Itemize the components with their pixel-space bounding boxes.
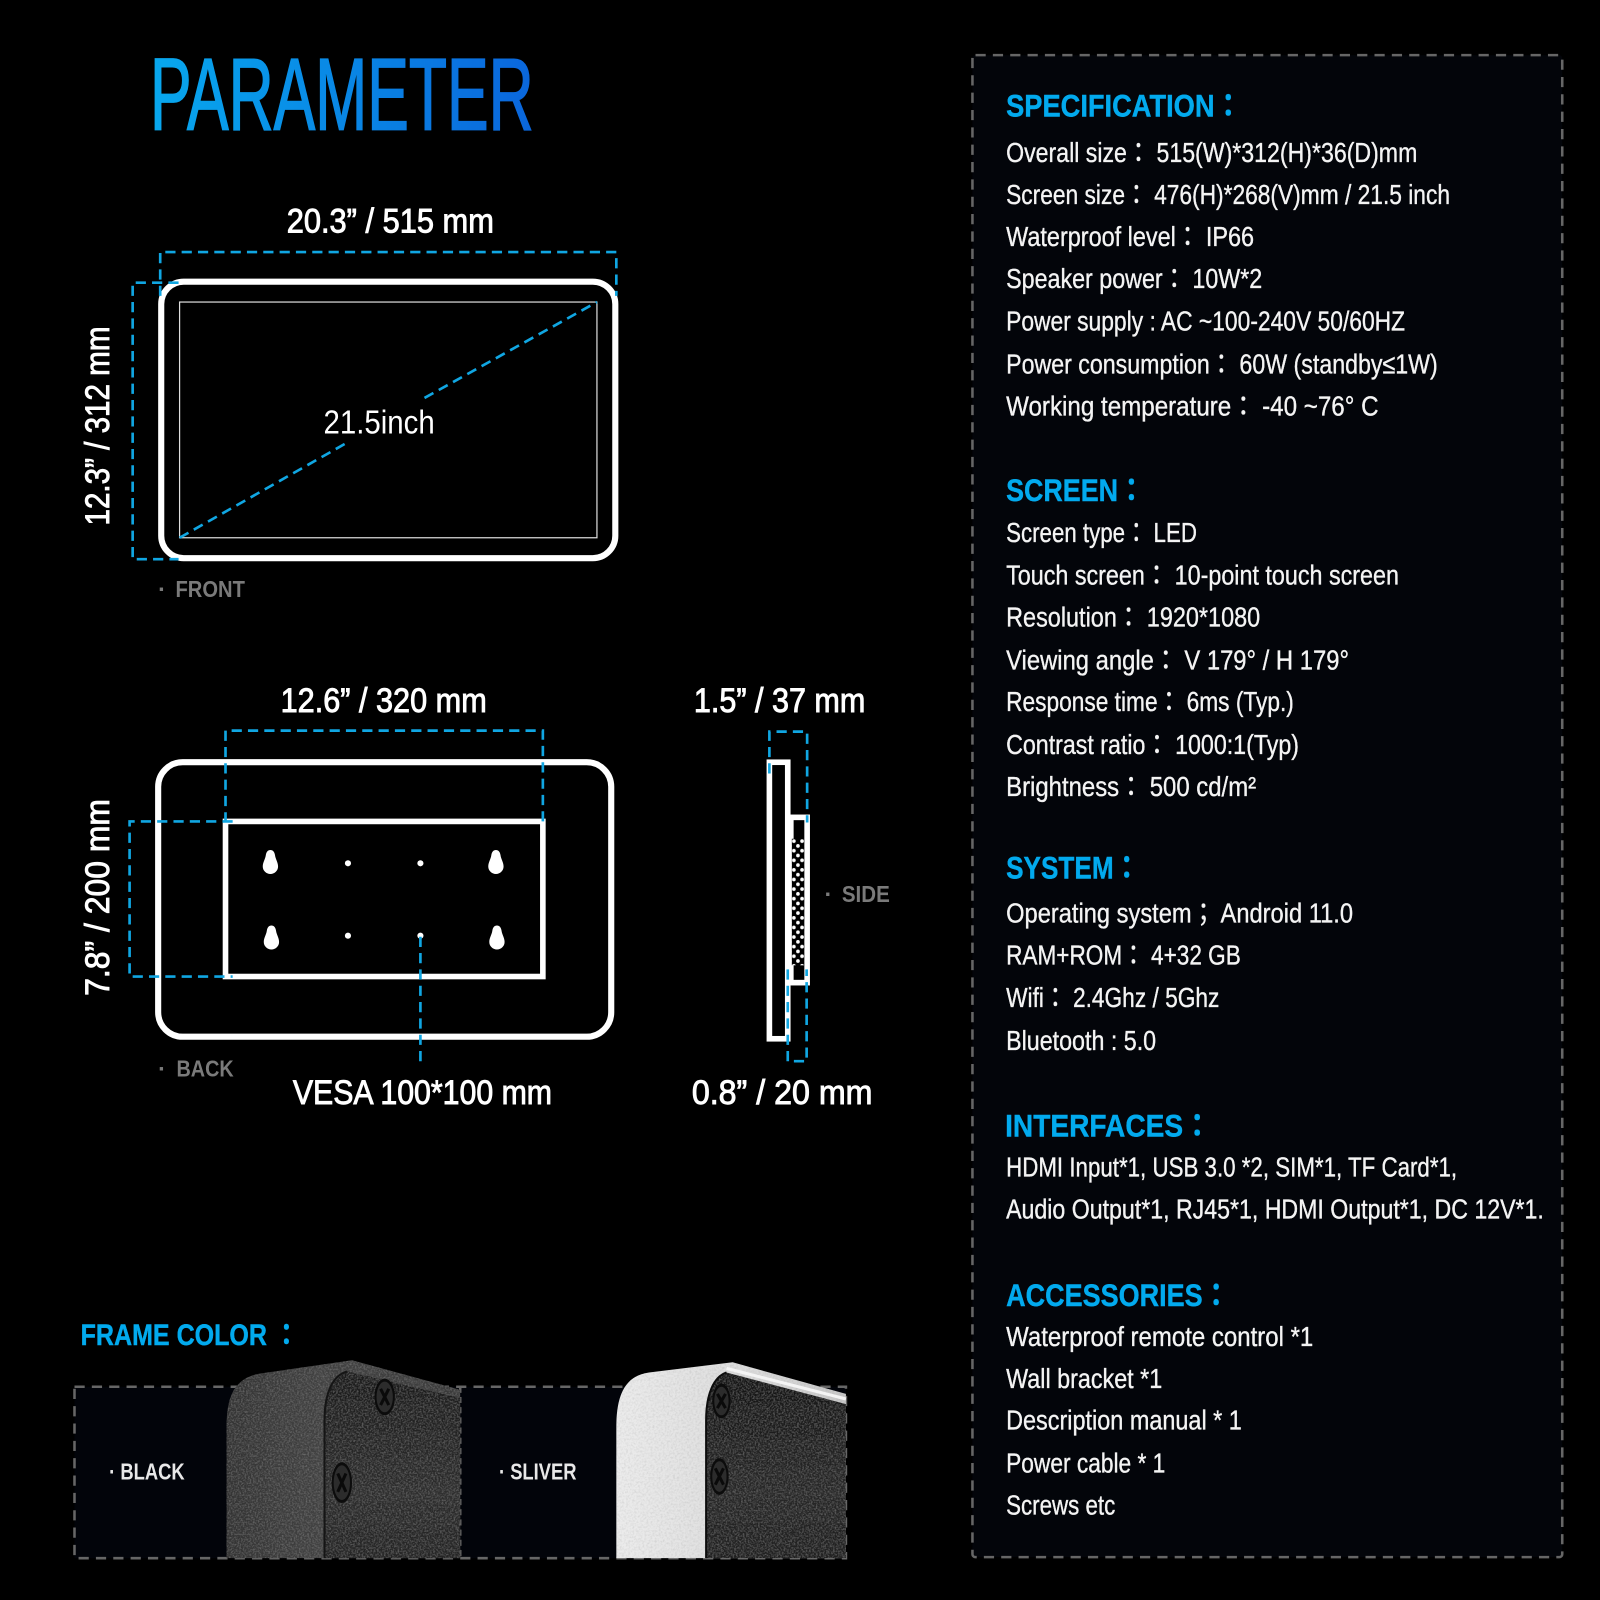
frame color dashed box xyxy=(74,1387,846,1558)
panel: specifications xyxy=(972,55,1562,1557)
title: PARAMETER xyxy=(150,38,534,152)
screen list: Viewing angle： V 179° / H 179° xyxy=(1006,644,1349,675)
panel: frame color xyxy=(74,1319,846,1558)
speaker perforation xyxy=(792,839,804,965)
side profile rear section xyxy=(791,817,807,983)
system list: Wifi： 2.4Ghz / 5Ghz xyxy=(1006,982,1219,1013)
screen size label: 21.5inch xyxy=(323,405,435,442)
back tag xyxy=(158,1056,234,1082)
screen list: Touch screen： 10-point touch screen xyxy=(1006,560,1399,591)
system list: RAM+ROM： 4+32 GB xyxy=(1006,939,1241,970)
front height label: 12.3” / 312 mm xyxy=(79,327,117,526)
panel: front view xyxy=(79,203,616,602)
accessories list: Wall bracket *1 xyxy=(1006,1363,1162,1394)
system heading: SYSTEM： xyxy=(1006,850,1140,886)
total depth label: 1.5” / 37 mm xyxy=(694,682,865,720)
interfaces list: HDMI Input*1, USB 3.0 *2, SIM*1, TF Card*1, xyxy=(1006,1152,1457,1183)
specification list: Power consumption： 60W (standby≤1W) xyxy=(1006,348,1438,379)
back height label: 7.8” / 200 mm xyxy=(79,799,117,996)
specifications dashed box xyxy=(972,55,1562,1557)
silver device photo xyxy=(616,1362,846,1558)
mount plate outline xyxy=(226,821,543,977)
screen heading: SCREEN： xyxy=(1006,472,1145,508)
black label: · BLACK xyxy=(109,1459,185,1485)
side dimension brackets xyxy=(769,732,807,1061)
front tag: FRONT xyxy=(176,576,245,602)
VESA label: VESA 100*100 mm xyxy=(293,1074,552,1112)
interfaces list xyxy=(1006,1152,1544,1224)
specification list xyxy=(1006,137,1450,421)
side tag: SIDE xyxy=(842,881,890,907)
screen list xyxy=(1006,517,1399,802)
system list: Bluetooth : 5.0 xyxy=(1006,1025,1156,1056)
screen diagonal line xyxy=(180,302,597,538)
rear depth label: 0.8” / 20 mm xyxy=(692,1074,872,1112)
specification list: Speaker power： 10W*2 xyxy=(1006,263,1262,294)
accessories list: Description manual * 1 xyxy=(1006,1405,1242,1436)
screen list: Response time： 6ms (Typ.) xyxy=(1006,686,1294,717)
panel: back view xyxy=(79,682,611,1112)
back tag: · xyxy=(158,1056,166,1082)
black device photo xyxy=(227,1360,460,1558)
side profile front section xyxy=(769,762,788,1039)
specification list: Screen size： 476(H)*268(V)mm / 21.5 inch xyxy=(1006,179,1450,210)
specification list: Working temperature： -40 ~76° C xyxy=(1006,390,1379,421)
accessories heading: ACCESSORIES： xyxy=(1006,1277,1230,1313)
system list: Operating system； Android 11.0 xyxy=(1006,897,1353,928)
frame color heading: FRAME COLOR ： xyxy=(81,1319,299,1352)
accessories list: Screws etc xyxy=(1006,1489,1115,1520)
back tag: BACK xyxy=(177,1056,234,1082)
silver label: · SLIVER xyxy=(499,1459,577,1485)
screen list: Brightness： 500 cd/m² xyxy=(1006,771,1256,802)
specification list: Waterproof level： IP66 xyxy=(1006,221,1254,252)
keyholes and mounting holes xyxy=(263,850,505,949)
specification heading: SPECIFICATION： xyxy=(1006,87,1242,123)
front bezel outline xyxy=(161,282,615,558)
front width label: 20.3” / 515 mm xyxy=(287,203,494,241)
specification list: Overall size： 515(W)*312(H)*36(D)mm xyxy=(1006,137,1417,168)
screen list: Screen type： LED xyxy=(1006,517,1197,548)
accessories list xyxy=(1006,1321,1313,1520)
divider xyxy=(459,1387,461,1558)
back dimension brackets xyxy=(130,731,543,1061)
system list xyxy=(1006,897,1353,1056)
specification list: Power supply : AC ~100-240V 50/60HZ xyxy=(1006,306,1405,337)
front screen outline xyxy=(180,302,597,538)
side tag xyxy=(824,881,890,907)
panel: side view xyxy=(692,682,890,1112)
side tag: · xyxy=(824,881,832,907)
front tag: · xyxy=(158,576,166,602)
front dimension brackets xyxy=(133,252,616,559)
screen list: Resolution： 1920*1080 xyxy=(1006,602,1260,633)
accessories list: Power cable * 1 xyxy=(1006,1447,1165,1478)
accessories list: Waterproof remote control *1 xyxy=(1006,1321,1313,1352)
back width label: 12.6” / 320 mm xyxy=(281,682,487,720)
screen list: Contrast ratio： 1000:1(Typ) xyxy=(1006,729,1299,760)
back outline xyxy=(158,762,611,1037)
interfaces heading: INTERFACES： xyxy=(1005,1108,1211,1144)
